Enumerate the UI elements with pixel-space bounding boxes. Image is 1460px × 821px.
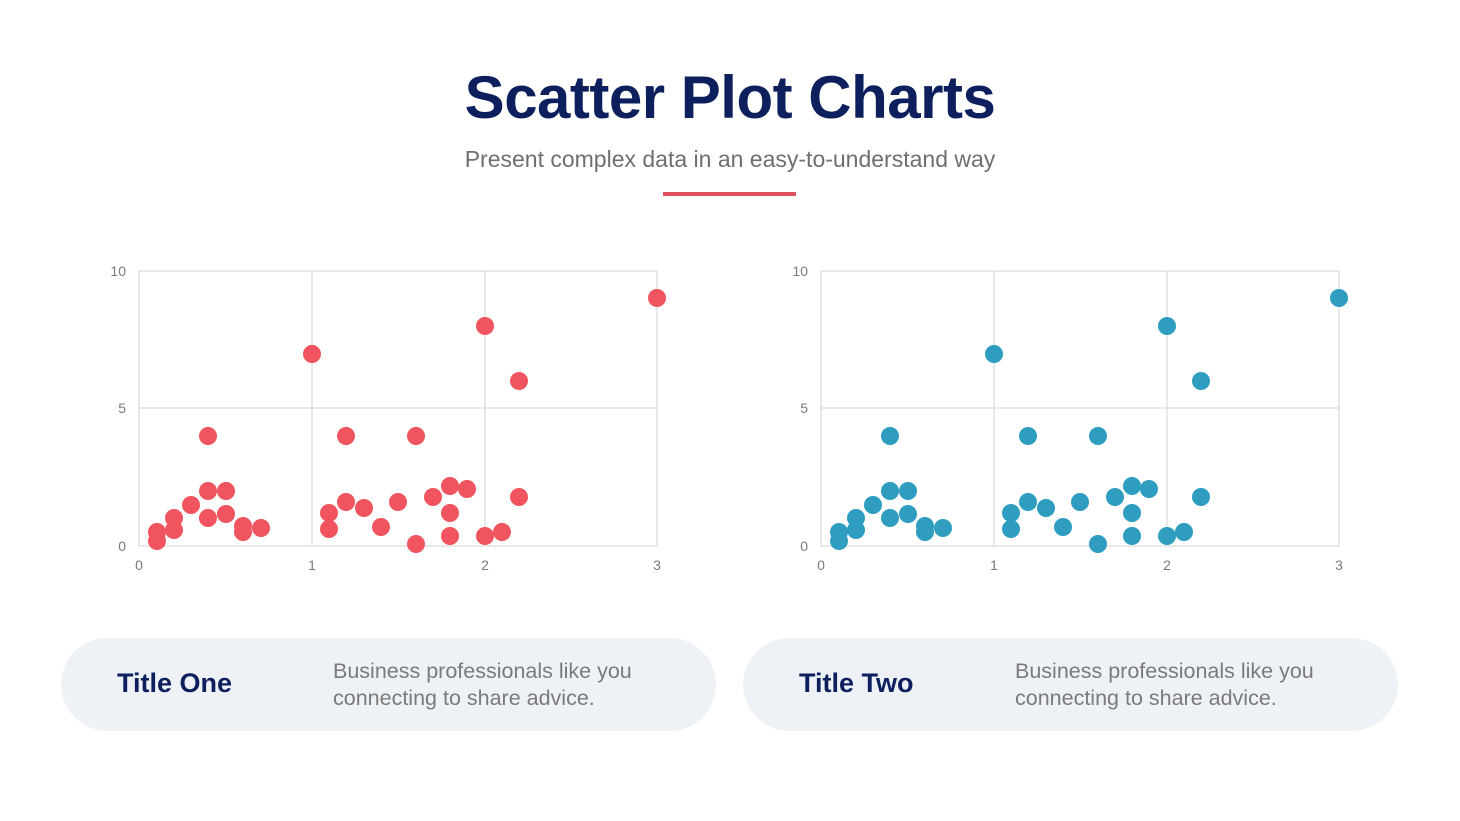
panel: title one <box>61 638 716 731</box>
panel: title one: Title One <box>117 668 232 698</box>
panel: title one: Business professionals like you <box>333 659 632 683</box>
panel: title two: Title Two <box>799 668 914 698</box>
panel: title two <box>743 638 1398 731</box>
chart: teal scatter <box>792 263 1348 573</box>
subtitle: Present complex data in an easy-to-understand way <box>465 146 995 172</box>
panel: title two: Business professionals like you <box>1015 659 1314 683</box>
charts <box>111 266 1348 570</box>
title: Scatter Plot Charts <box>465 64 995 131</box>
panel: title two: connecting to share advice. <box>1015 686 1277 710</box>
accent line <box>663 192 796 196</box>
chart: red scatter <box>110 263 666 573</box>
panel: title one: connecting to share advice. <box>333 686 595 710</box>
